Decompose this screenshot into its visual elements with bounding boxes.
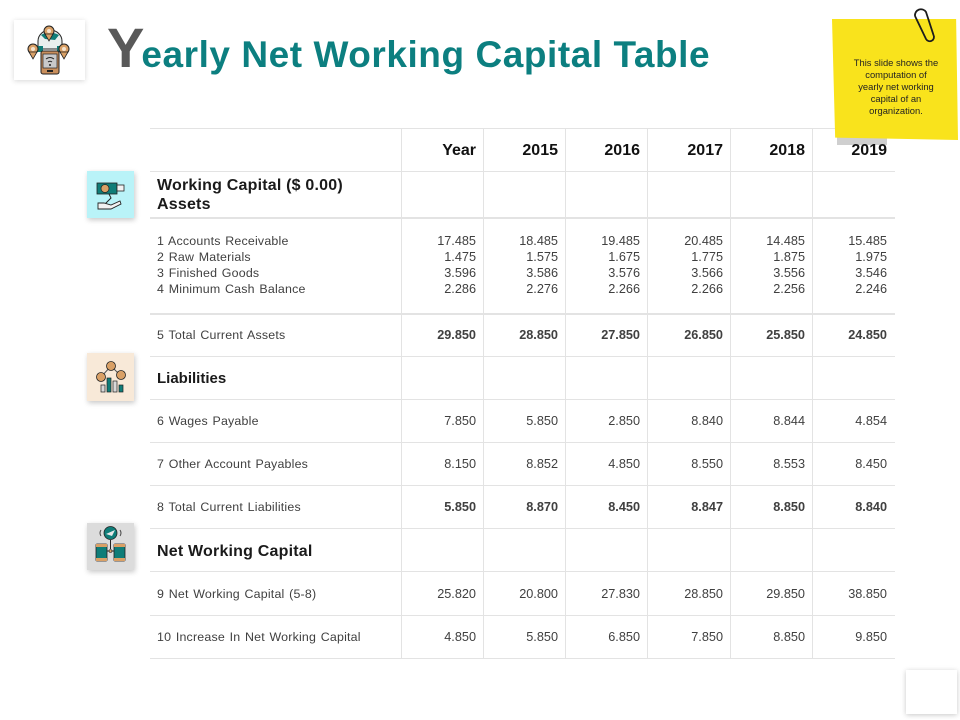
row: wages payable: 8.840: [691, 414, 723, 428]
row: minimum cash balance: 2.266: [608, 282, 640, 296]
row: wages payable: 2.850: [608, 414, 640, 428]
row: other account payables: 4.850: [608, 457, 640, 471]
row: minimum cash balance: [157, 282, 887, 296]
row: finished goods: 3.566: [691, 266, 723, 280]
row: accounts receivable: 15.485: [848, 234, 887, 248]
table header row: 2015: [522, 142, 558, 159]
sticky note text: capital of an: [871, 93, 921, 104]
sticky note text: This slide shows the: [854, 57, 938, 68]
table header row: 2019: [851, 142, 887, 159]
row: total current liabilities: 8.847: [691, 500, 723, 514]
row: total current liabilities: 8.850: [773, 500, 805, 514]
header icon: location pins and phone: [14, 20, 85, 80]
icon: hand holding banknote: [87, 171, 134, 218]
row: raw materials: 2 Raw Materials: [157, 250, 251, 264]
icon: paper clip: [914, 8, 935, 42]
row: total current assets: 26.850: [684, 328, 723, 342]
row: total current assets: [157, 328, 887, 342]
row: net working capital: 20.800: [519, 587, 558, 601]
row: finished goods: 3.556: [773, 266, 805, 280]
section heading: working capital assets: Working Capital ($ 0.00): [157, 177, 343, 194]
row: accounts receivable: 17.485: [437, 234, 476, 248]
row: accounts receivable: 1 Accounts Receivable: [157, 234, 289, 248]
icon: globe and two devices: [87, 523, 134, 570]
row: other account payables: 8.150: [444, 457, 476, 471]
row: increase in net working capital: 7.850: [691, 630, 723, 644]
row: minimum cash balance: 2.266: [691, 282, 723, 296]
row: total current assets: 29.850: [437, 328, 476, 342]
section heading: net working capital: Net Working Capital: [157, 543, 313, 560]
row: other account payables: 8.553: [773, 457, 805, 471]
row: total current assets: 25.850: [766, 328, 805, 342]
row: total current liabilities: [157, 500, 887, 514]
row: wages payable: 6 Wages Payable: [157, 414, 259, 428]
row: increase in net working capital: 5.850: [526, 630, 558, 644]
row: total current liabilities: 8 Total Current Liabilities: [157, 500, 301, 514]
row: total current assets: 5 Total Current Assets: [157, 328, 285, 342]
row: increase in net working capital: 4.850: [444, 630, 476, 644]
row: total current assets: 27.850: [601, 328, 640, 342]
row: accounts receivable: 20.485: [684, 234, 723, 248]
row: minimum cash balance: 2.246: [855, 282, 887, 296]
sticky note text: [854, 57, 938, 116]
row: raw materials: 1.475: [444, 250, 476, 264]
section heading: working capital assets: Assets: [157, 196, 211, 213]
row: accounts receivable: [157, 234, 887, 248]
row: other account payables: 8.852: [526, 457, 558, 471]
row: minimum cash balance: 2.286: [444, 282, 476, 296]
row: wages payable: 4.854: [855, 414, 887, 428]
row: total current assets: 24.850: [848, 328, 887, 342]
row: finished goods: 3.586: [526, 266, 558, 280]
table header row: 2017: [687, 142, 723, 159]
row: raw materials: 1.575: [526, 250, 558, 264]
row: total current liabilities: 5.850: [444, 500, 476, 514]
row: wages payable: 8.844: [773, 414, 805, 428]
row: raw materials: 1.875: [773, 250, 805, 264]
title: Yearly Net Working Capital Table: [107, 16, 710, 79]
sticky note text: organization.: [869, 105, 923, 116]
row: accounts receivable: 18.485: [519, 234, 558, 248]
row: other account payables: [157, 457, 887, 471]
section heading: liabilities: Liabilities: [157, 370, 226, 387]
row: finished goods: 3 Finished Goods: [157, 266, 259, 280]
table header row: Year: [442, 142, 476, 159]
table header row: [442, 142, 887, 159]
row: raw materials: 1.775: [691, 250, 723, 264]
row: finished goods: [157, 266, 887, 280]
row: minimum cash balance: 4 Minimum Cash Balance: [157, 282, 306, 296]
row: net working capital: 9 Net Working Capital (5-8): [157, 587, 316, 601]
row: wages payable: 5.850: [526, 414, 558, 428]
row: net working capital: 27.830: [601, 587, 640, 601]
row: total current assets: 28.850: [519, 328, 558, 342]
row: accounts receivable: 14.485: [766, 234, 805, 248]
row: raw materials: 1.675: [608, 250, 640, 264]
row: minimum cash balance: 2.276: [526, 282, 558, 296]
sticky note text: yearly net working: [858, 81, 934, 92]
row: finished goods: 3.596: [444, 266, 476, 280]
sticky note: [832, 19, 958, 145]
row: increase in net working capital: 8.850: [773, 630, 805, 644]
row: finished goods: 3.546: [855, 266, 887, 280]
table header row: 2016: [604, 142, 640, 159]
row: increase in net working capital: [157, 630, 887, 644]
row: net working capital: 25.820: [437, 587, 476, 601]
row: net working capital: 28.850: [684, 587, 723, 601]
row: wages payable: 7.850: [444, 414, 476, 428]
row: raw materials: [157, 250, 887, 264]
blank box bottom right: [906, 670, 957, 714]
row: increase in net working capital: 10 Increase In Net Working Capital: [157, 630, 361, 644]
icon: coins and bar chart: [87, 353, 134, 401]
section heading: working capital assets: [157, 177, 343, 213]
row: raw materials: 1.975: [855, 250, 887, 264]
row: finished goods: 3.576: [608, 266, 640, 280]
row: increase in net working capital: 9.850: [855, 630, 887, 644]
row: total current liabilities: 8.450: [608, 500, 640, 514]
row: total current liabilities: 8.840: [855, 500, 887, 514]
row: increase in net working capital: 6.850: [608, 630, 640, 644]
row: other account payables: 8.450: [855, 457, 887, 471]
row: other account payables: 7 Other Account Payables: [157, 457, 308, 471]
table header row: 2018: [769, 142, 805, 159]
row: total current liabilities: 8.870: [526, 500, 558, 514]
row: net working capital: [157, 587, 887, 601]
row: accounts receivable: 19.485: [601, 234, 640, 248]
row: net working capital: 38.850: [848, 587, 887, 601]
row: net working capital: 29.850: [766, 587, 805, 601]
sticky note text: computation of: [865, 69, 927, 80]
row: minimum cash balance: 2.256: [773, 282, 805, 296]
row: wages payable: [157, 414, 887, 428]
row: other account payables: 8.550: [691, 457, 723, 471]
